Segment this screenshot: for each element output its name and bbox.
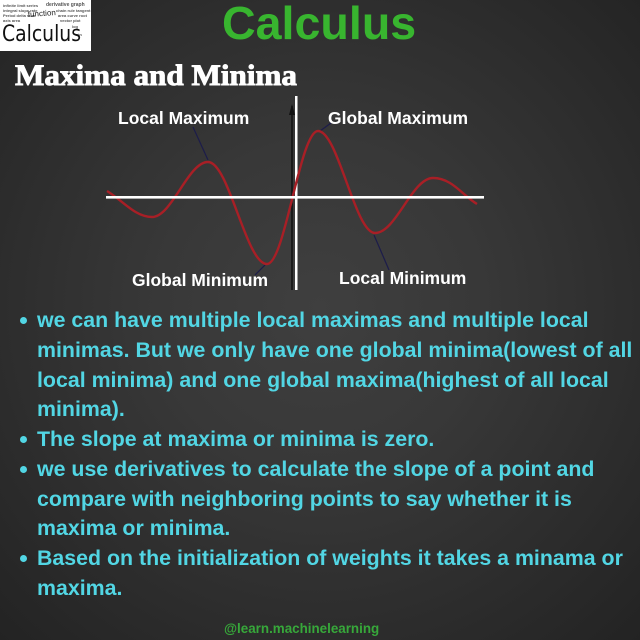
- logo: calculus word cloud: vector plot: [60, 18, 81, 23]
- bullet 1: local minima) and one global maxima(highest of all local: [37, 368, 609, 392]
- logo: calculus word cloud: axis area: [3, 18, 21, 23]
- logo: calculus word cloud: infinite limit series: [3, 3, 39, 8]
- bullet 3: we use derivatives to calculate the slope of a point and: [37, 457, 594, 481]
- logo: calculus word cloud: Period delta sum: [3, 13, 36, 18]
- bullet 3: compare with neighboring points to say whether it is: [37, 487, 572, 511]
- bullet 4: [20, 546, 623, 600]
- leader lines: [193, 123, 389, 275]
- label: local minimum: Local Minimum: [339, 268, 466, 288]
- logo: calculus word cloud: [0, 0, 91, 51]
- label: global minimum: Global Minimum: [132, 270, 268, 290]
- horizontal axis: [106, 196, 484, 199]
- logo: calculus word cloud: integral slope rate: [3, 8, 38, 13]
- bullet list: [20, 308, 632, 600]
- bullet 4: maxima.: [37, 576, 122, 600]
- logo: calculus word cloud: sin: [76, 32, 82, 37]
- bullet 3: maxima or minima.: [37, 516, 230, 540]
- bullet 1: [20, 308, 632, 421]
- logo: calculus word cloud: function: [28, 8, 56, 19]
- chart: maxima and minima curve: [106, 96, 484, 290]
- footer handle: @learn.machinelearning: [224, 621, 379, 636]
- bullet 2: The slope at maxima or minima is zero.: [37, 427, 434, 451]
- logo: calculus word cloud: log: [72, 24, 79, 29]
- label: global maximum: Global Maximum: [328, 108, 468, 128]
- subheading: Maxima and Minima: [15, 59, 297, 92]
- logo: calculus word cloud: chain rule tangent: [56, 8, 91, 13]
- bullet 1: we can have multiple local maximas and multiple local: [37, 308, 589, 332]
- logo: calculus word cloud: area curve root: [58, 13, 88, 18]
- bullet 4: Based on the initialization of weights it takes a minama or: [37, 546, 623, 570]
- bullet 3: [20, 457, 594, 540]
- logo: calculus word cloud: derivative graph: [46, 2, 85, 8]
- red curve: [107, 131, 477, 264]
- label: local maximum: Local Maximum: [118, 108, 249, 128]
- bullet 1: minimas. But we only have one global minima(lowest of all: [37, 338, 632, 362]
- bullet 1: minima).: [37, 397, 125, 421]
- vertical axis: [289, 96, 298, 290]
